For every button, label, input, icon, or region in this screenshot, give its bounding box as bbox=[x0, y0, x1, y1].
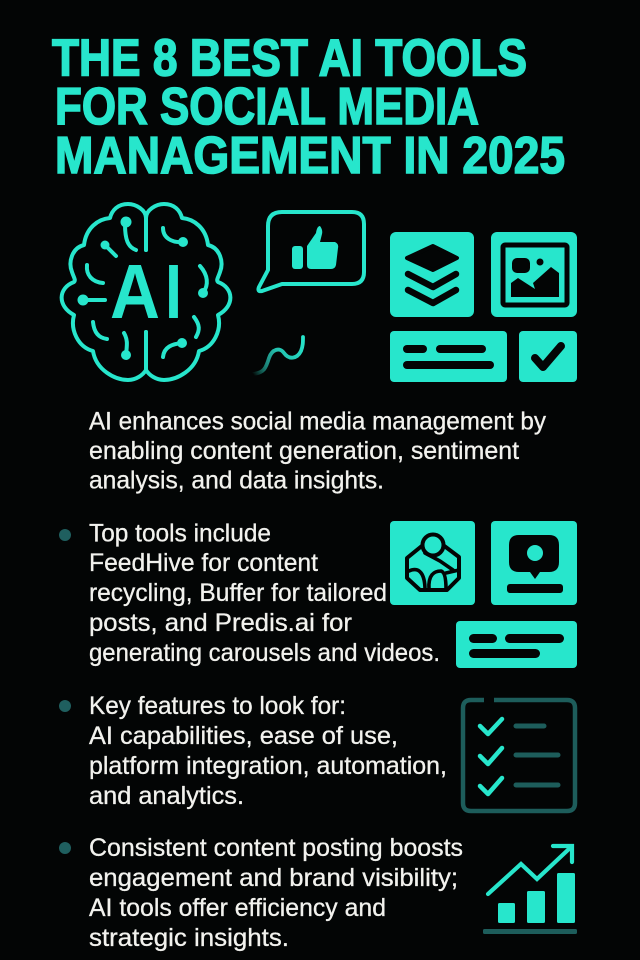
bullet 1 text: Top tools include bbox=[89, 520, 271, 548]
bullet 3 marker bbox=[59, 842, 71, 854]
bullet 3 text: AI tools offer efficiency and bbox=[89, 894, 386, 922]
bullet 2 text: AI capabilities, ease of use, bbox=[89, 722, 398, 750]
bullet 1 text bbox=[89, 520, 440, 667]
bullet 1 marker bbox=[59, 529, 71, 541]
icon tile: text lines bbox=[456, 621, 577, 668]
icon: squiggle bbox=[253, 337, 303, 374]
icon tile: community hexagon bbox=[390, 521, 475, 605]
bullet 2 text: platform integration, automation, bbox=[89, 752, 447, 780]
bullet 3 text bbox=[89, 834, 463, 952]
title: MANAGEMENT IN 2025 bbox=[55, 127, 565, 185]
intro text bbox=[89, 408, 546, 494]
intro text: analysis, and data insights. bbox=[89, 466, 384, 494]
icon tile: layers bbox=[390, 232, 474, 317]
icon: AI brain: A bbox=[110, 249, 160, 335]
bullet 1 text: posts, and Predis.ai for bbox=[89, 609, 352, 637]
title: THE 8 BEST AI TOOLS bbox=[52, 30, 527, 88]
intro text: AI enhances social media management by bbox=[89, 408, 546, 436]
bullet 3 text: Consistent content posting boosts bbox=[89, 834, 463, 862]
bullet 2 text bbox=[89, 692, 447, 810]
title bbox=[52, 30, 565, 185]
icon: speech bubble with thumbs up bbox=[258, 212, 364, 291]
icon: AI brain bbox=[62, 204, 230, 380]
icon tile: check bbox=[519, 331, 577, 382]
icon: AI brain: I bbox=[165, 249, 182, 335]
title: FOR SOCIAL MEDIA bbox=[55, 78, 479, 136]
bullet 1 text: recycling, Buffer for tailored bbox=[89, 579, 387, 607]
bullet 3 text: engagement and brand visibility; bbox=[89, 864, 458, 892]
icon: growth chart bbox=[483, 846, 577, 934]
bullet 2 marker bbox=[59, 700, 71, 712]
icon tile: image bbox=[491, 232, 577, 317]
bullet 2 text: and analytics. bbox=[89, 782, 244, 810]
bullet 1 text: FeedHive for content bbox=[89, 549, 318, 577]
icon tile: text lines bbox=[390, 331, 507, 382]
intro text: enabling content generation, sentiment bbox=[89, 437, 519, 465]
icon: checklist bbox=[463, 700, 575, 811]
bullet 1 text: generating carousels and videos. bbox=[89, 639, 440, 667]
icon tile: chat bubble bbox=[491, 521, 577, 605]
bullet 3 text: strategic insights. bbox=[89, 924, 289, 952]
bullet 2 text: Key features to look for: bbox=[89, 692, 346, 720]
